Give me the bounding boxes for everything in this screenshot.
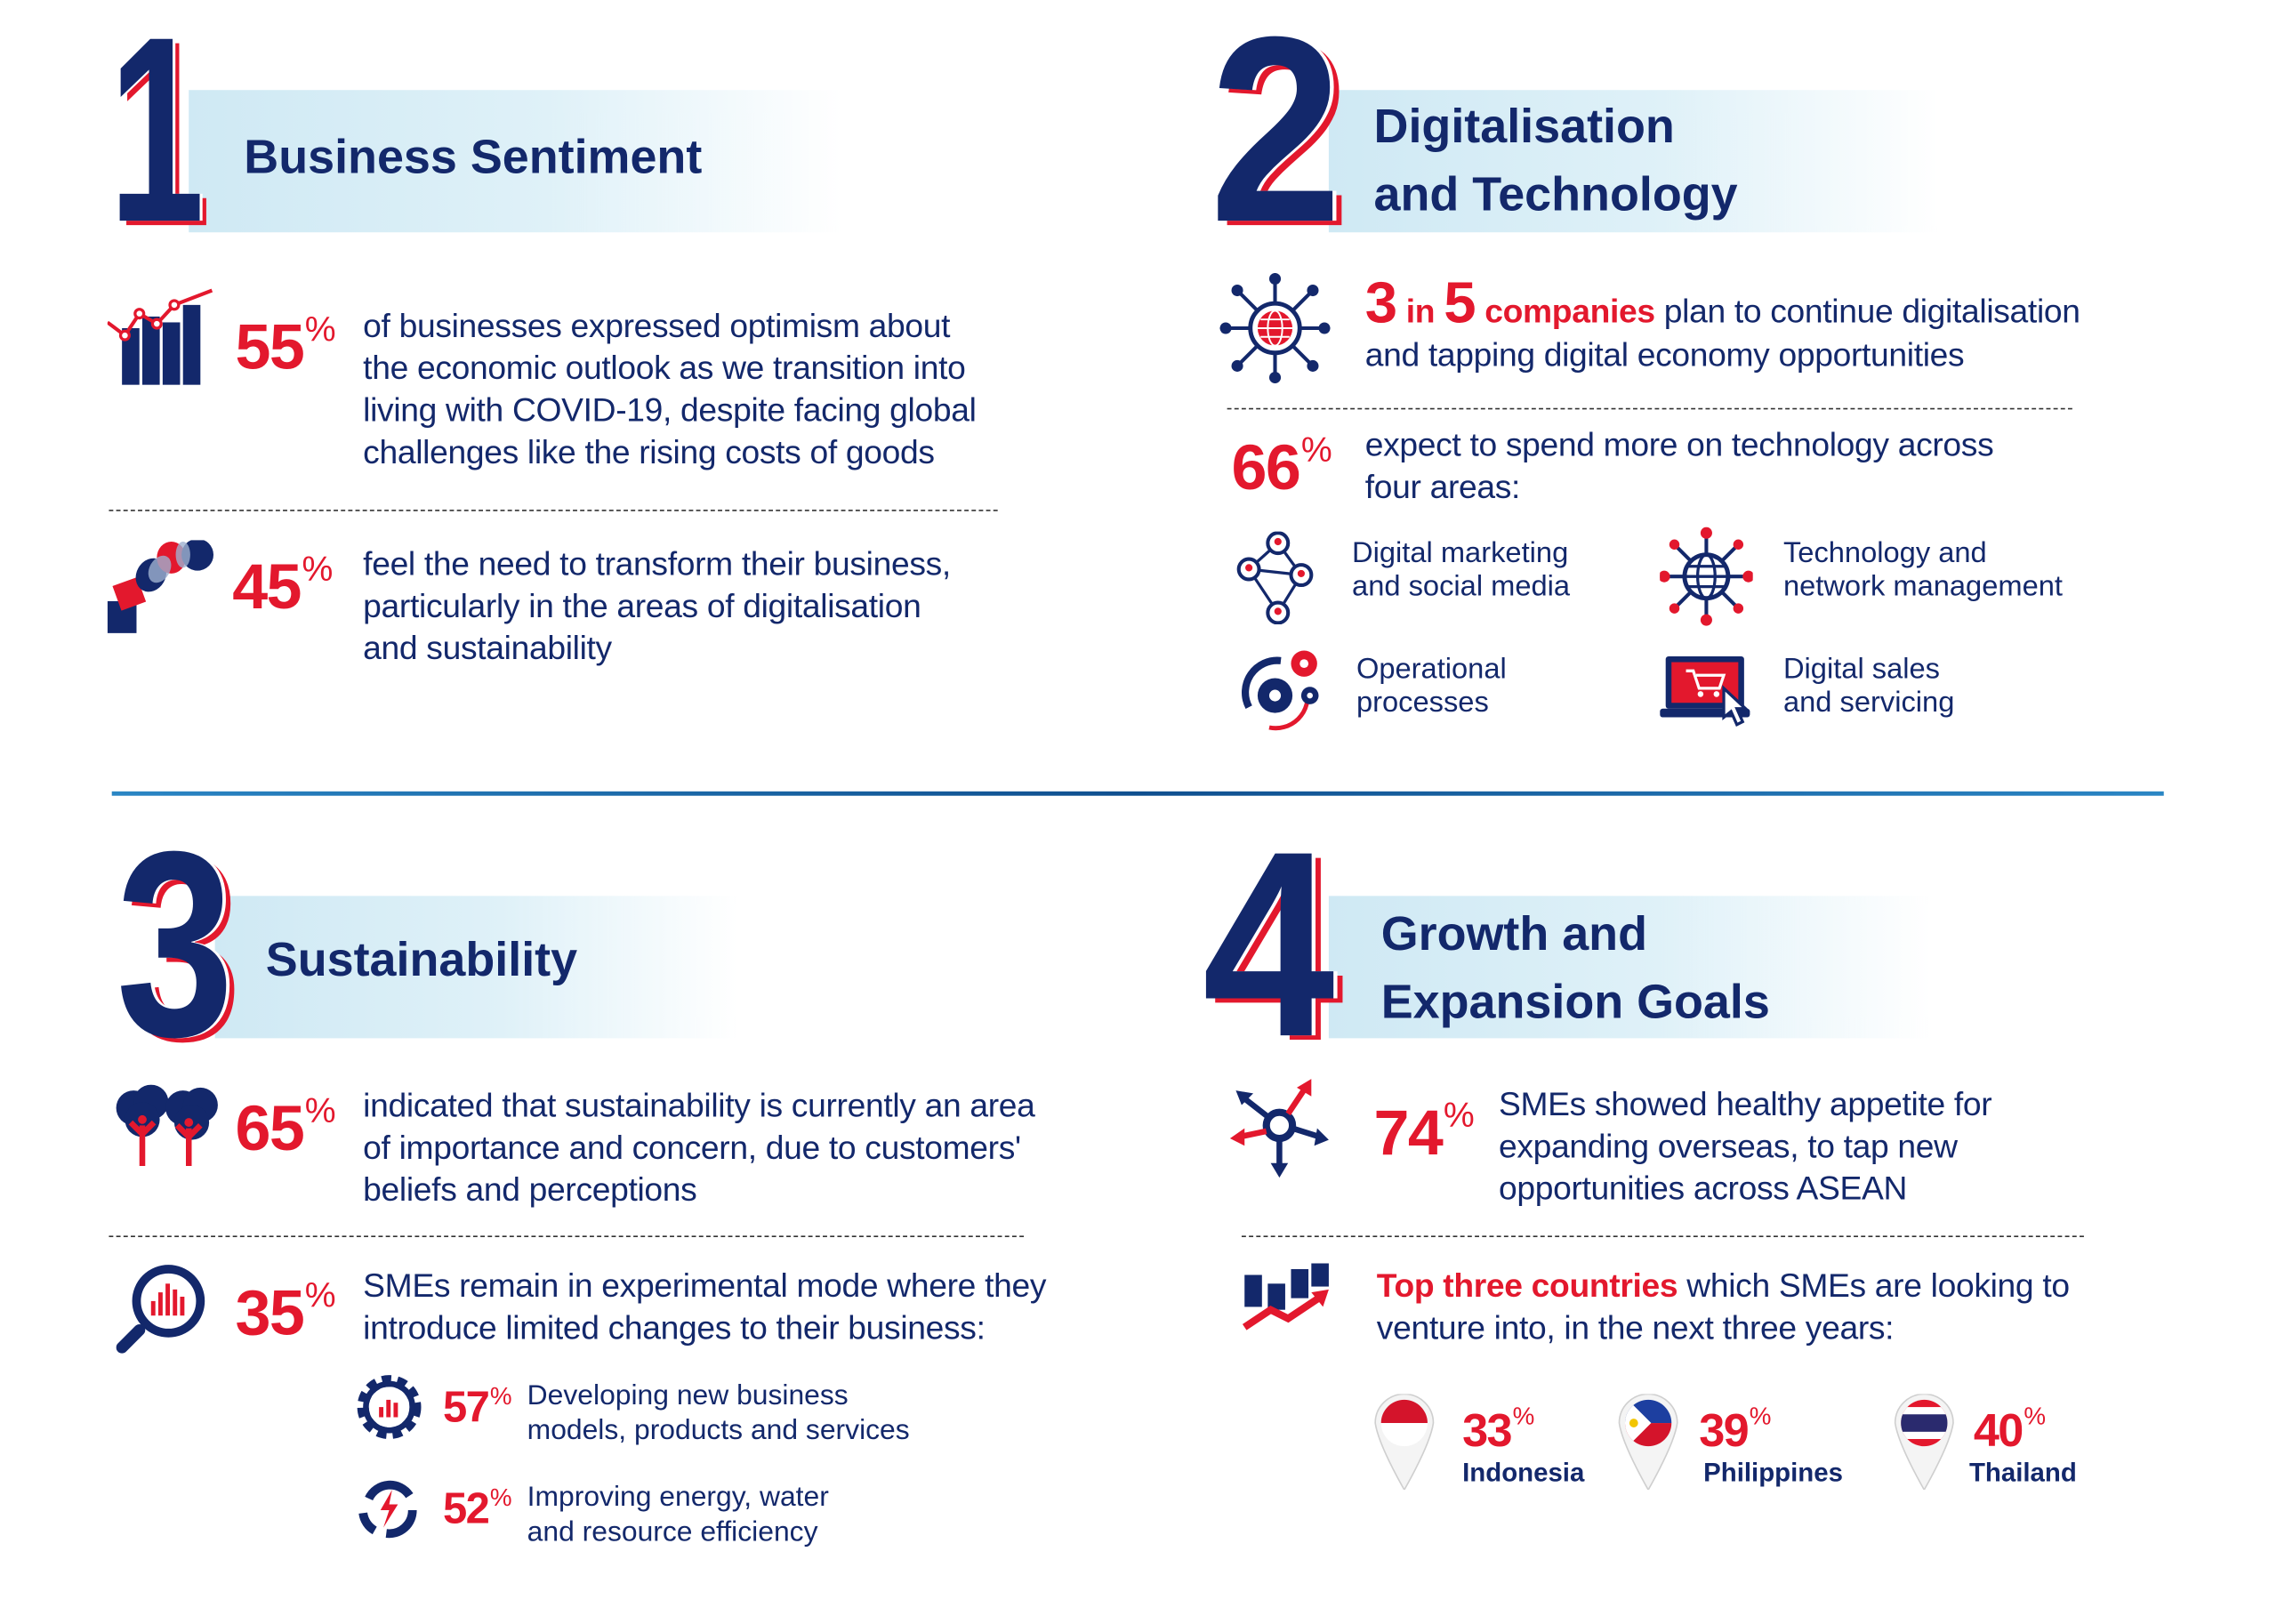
title: Digitalisation and Technology: [1374, 99, 1738, 221]
label: [1356, 654, 1507, 718]
text 65%: of importance and concern, due to customers': [363, 1129, 1021, 1166]
band 3: [215, 896, 737, 1038]
icon: trees: [116, 1085, 218, 1166]
icon: digital virus globe: [1220, 273, 1331, 383]
item: operational processes: [1242, 651, 1507, 731]
text 52%: [527, 1481, 829, 1548]
label: Philippines: [1703, 1458, 1843, 1487]
title: Growth and Expansion Goals: Growth and: [1381, 906, 1647, 960]
label: Indonesia: [1462, 1458, 1584, 1487]
item: digital marketing: [1236, 532, 1571, 624]
label: [1352, 537, 1571, 602]
text 52%: Improving energy, water: [527, 1481, 829, 1513]
country: Philippines: [1619, 1394, 1843, 1491]
stat 57%: 57%: [443, 1382, 511, 1432]
text 57%: Developing new business: [527, 1379, 849, 1411]
label: processes: [1356, 686, 1489, 718]
text 52%: and resource efficiency: [527, 1516, 817, 1548]
stat 74%: 74%: [1374, 1097, 1473, 1169]
text 57%: models, products and services: [527, 1414, 910, 1446]
text 55%: of businesses expressed optimism about: [363, 306, 950, 344]
icon: gears: [1242, 651, 1318, 731]
title: Digitalisation and Technology: Digitalisation: [1374, 99, 1675, 152]
icon: globe network: [1660, 527, 1753, 626]
text: 3 in 5 companies: 3 in 5 companies plan to continue digitalisation: [1365, 271, 2080, 335]
label: network management: [1783, 570, 2063, 602]
text: top three countries: venture into, in the next three years:: [1377, 1308, 1894, 1347]
text 45%: and sustainability: [363, 629, 612, 666]
label: Digital sales: [1783, 654, 1940, 686]
text: top three countries: [1377, 1265, 2070, 1349]
stat 52%: 52%: [443, 1484, 511, 1533]
band 2: [1329, 90, 1939, 232]
stat 33%: 33%: [1462, 1403, 1533, 1457]
icon: network people: [1236, 532, 1313, 624]
label: and servicing: [1783, 686, 1954, 718]
stat 45%: 45%: [232, 551, 332, 623]
divider: [112, 792, 2164, 796]
text 35%: [363, 1266, 1046, 1347]
band 4: [1329, 896, 1931, 1038]
text 45%: feel the need to transform their business,: [363, 544, 951, 583]
stat 40%: 40%: [1974, 1403, 2044, 1457]
text 55%: [363, 306, 977, 470]
icon: expansion arrows: [1230, 1070, 1334, 1178]
section 1: business sentiment: [107, 0, 998, 666]
text: 3 in 5 companies: and tapping digital economy opportunities: [1365, 335, 1964, 374]
text 45%: particularly in the areas of digitalisation: [363, 587, 921, 624]
label: [1783, 537, 2063, 602]
numeral 3: 3: [117, 796, 229, 1092]
icon: pin Indonesia: [1374, 1394, 1434, 1491]
text 35%: SMEs remain in experimental mode where they: [363, 1266, 1046, 1304]
sub item 57%: [358, 1375, 910, 1446]
title: Growth and Expansion Goals: [1381, 899, 1770, 1035]
label: Operational: [1356, 654, 1507, 686]
label: Digital marketing: [1352, 537, 1568, 569]
text 74%: SMEs showed healthy appetite for: [1499, 1085, 1991, 1122]
numeral 4: 4: [1203, 796, 1330, 1092]
icon: energy recycle: [358, 1480, 417, 1539]
text: top three countries: Top three countries which SMEs are looking to: [1377, 1266, 2070, 1304]
icon: laptop cart: [1660, 656, 1750, 727]
section 3: sustainability: [109, 796, 1046, 1548]
band 1: [189, 90, 842, 232]
text 35%: introduce limited changes to their business:: [363, 1308, 986, 1347]
title: Digitalisation and Technology: and Technology: [1374, 167, 1738, 221]
text 66%: [1365, 425, 1993, 505]
text 74%: [1499, 1083, 1991, 1210]
item: technology and network: [1660, 527, 2063, 626]
label: Thailand: [1969, 1458, 2077, 1487]
icon: magnifier chart: [116, 1265, 205, 1354]
stat 35%: 35%: [235, 1276, 334, 1349]
text 55%: challenges like the rising costs of goods: [363, 433, 935, 470]
label: and social media: [1352, 570, 1570, 602]
text 55%: living with COVID-19, despite facing global: [363, 390, 977, 429]
stat 39%: 39%: [1699, 1403, 1770, 1457]
icon: transform blocks: [107, 540, 213, 633]
text: 3 in 5 companies: [1365, 271, 2080, 374]
text 74%: opportunities across ASEAN: [1499, 1169, 1907, 1207]
stat 66%: 66%: [1232, 431, 1331, 504]
icon: gear chart: [358, 1375, 422, 1439]
label: Technology and: [1783, 537, 1987, 569]
item: digital sales: [1660, 654, 1954, 727]
section 4: growth and expansion goals: [1203, 796, 2084, 1491]
stat 65%: 65%: [235, 1092, 334, 1164]
text 57%: [527, 1379, 910, 1446]
title: Business Sentiment: Business Sentiment: [244, 129, 702, 183]
country: Indonesia: [1374, 1394, 1585, 1491]
text 66%: four areas:: [1365, 468, 1520, 505]
text 66%: expect to spend more on technology across: [1365, 425, 1993, 463]
text 65%: [363, 1086, 1035, 1208]
title: Growth and Expansion Goals: Expansion Goals: [1381, 975, 1770, 1028]
country: Thailand: [1895, 1394, 2077, 1491]
sub item 52%: [358, 1480, 829, 1548]
text 74%: expanding overseas, to tap new: [1499, 1127, 1958, 1164]
stat 55%: 55%: [235, 310, 334, 383]
label: [1783, 654, 1954, 718]
text 65%: beliefs and perceptions: [363, 1170, 696, 1208]
section 2: digitalisation and technology: [1210, 0, 2080, 731]
text 65%: indicated that sustainability is currently an area: [363, 1086, 1035, 1124]
icon: bar chart trend: [107, 288, 213, 385]
title: Sustainability: Sustainability: [266, 932, 577, 986]
text 45%: [363, 544, 951, 666]
icon: pin Philippines: [1619, 1394, 1678, 1491]
icon: pin Thailand: [1895, 1394, 1954, 1491]
icon: growth chart arrow: [1242, 1263, 1332, 1339]
text 55%: the economic outlook as we transition into: [363, 349, 966, 386]
